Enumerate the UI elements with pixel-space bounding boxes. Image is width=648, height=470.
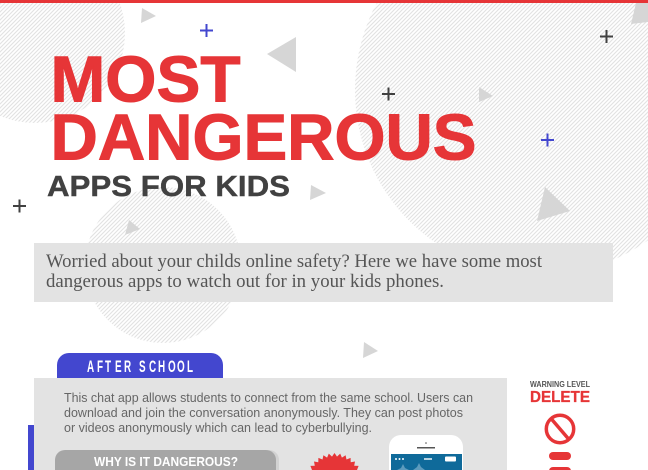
description: or videos anonymously which can lead to cyberbullying. — [64, 421, 372, 435]
red starburst badge — [308, 453, 361, 470]
plus markers — [13, 24, 613, 212]
icon: prohibited sign — [546, 415, 574, 443]
decorative triangles — [125, 3, 648, 358]
title line: DANGEROUS: DANGEROUS — [50, 100, 476, 174]
tab: After School — [57, 353, 223, 378]
title line: MOST: MOST — [50, 42, 240, 116]
top red bar — [0, 0, 648, 3]
subtitle: APPS FOR KIDS — [47, 171, 290, 203]
warning value: DELETE — [530, 389, 590, 406]
warning meter pills — [549, 452, 571, 470]
description: download and join the conversation anonymously. They can post photos — [64, 406, 463, 420]
phone illustration — [389, 435, 463, 470]
pill label: WHY IS IT DANGEROUS? — [94, 455, 238, 469]
panel: intro — [34, 243, 613, 302]
tab label: AFTERSCHOOL — [87, 357, 193, 376]
warning level — [530, 380, 590, 470]
intro text: dangerous apps to watch out for in your kids phones. — [46, 271, 444, 292]
title — [47, 42, 476, 203]
warning label: WARNING LEVEL — [530, 380, 590, 389]
intro text: Worried about your childs online safety? Here we have some most — [46, 251, 543, 272]
description: This chat app allows students to connect from the same school. Users can — [64, 391, 473, 405]
accent bar — [28, 425, 34, 470]
heading pill: why is it dangerous — [55, 450, 279, 470]
panel: After School — [34, 378, 507, 470]
